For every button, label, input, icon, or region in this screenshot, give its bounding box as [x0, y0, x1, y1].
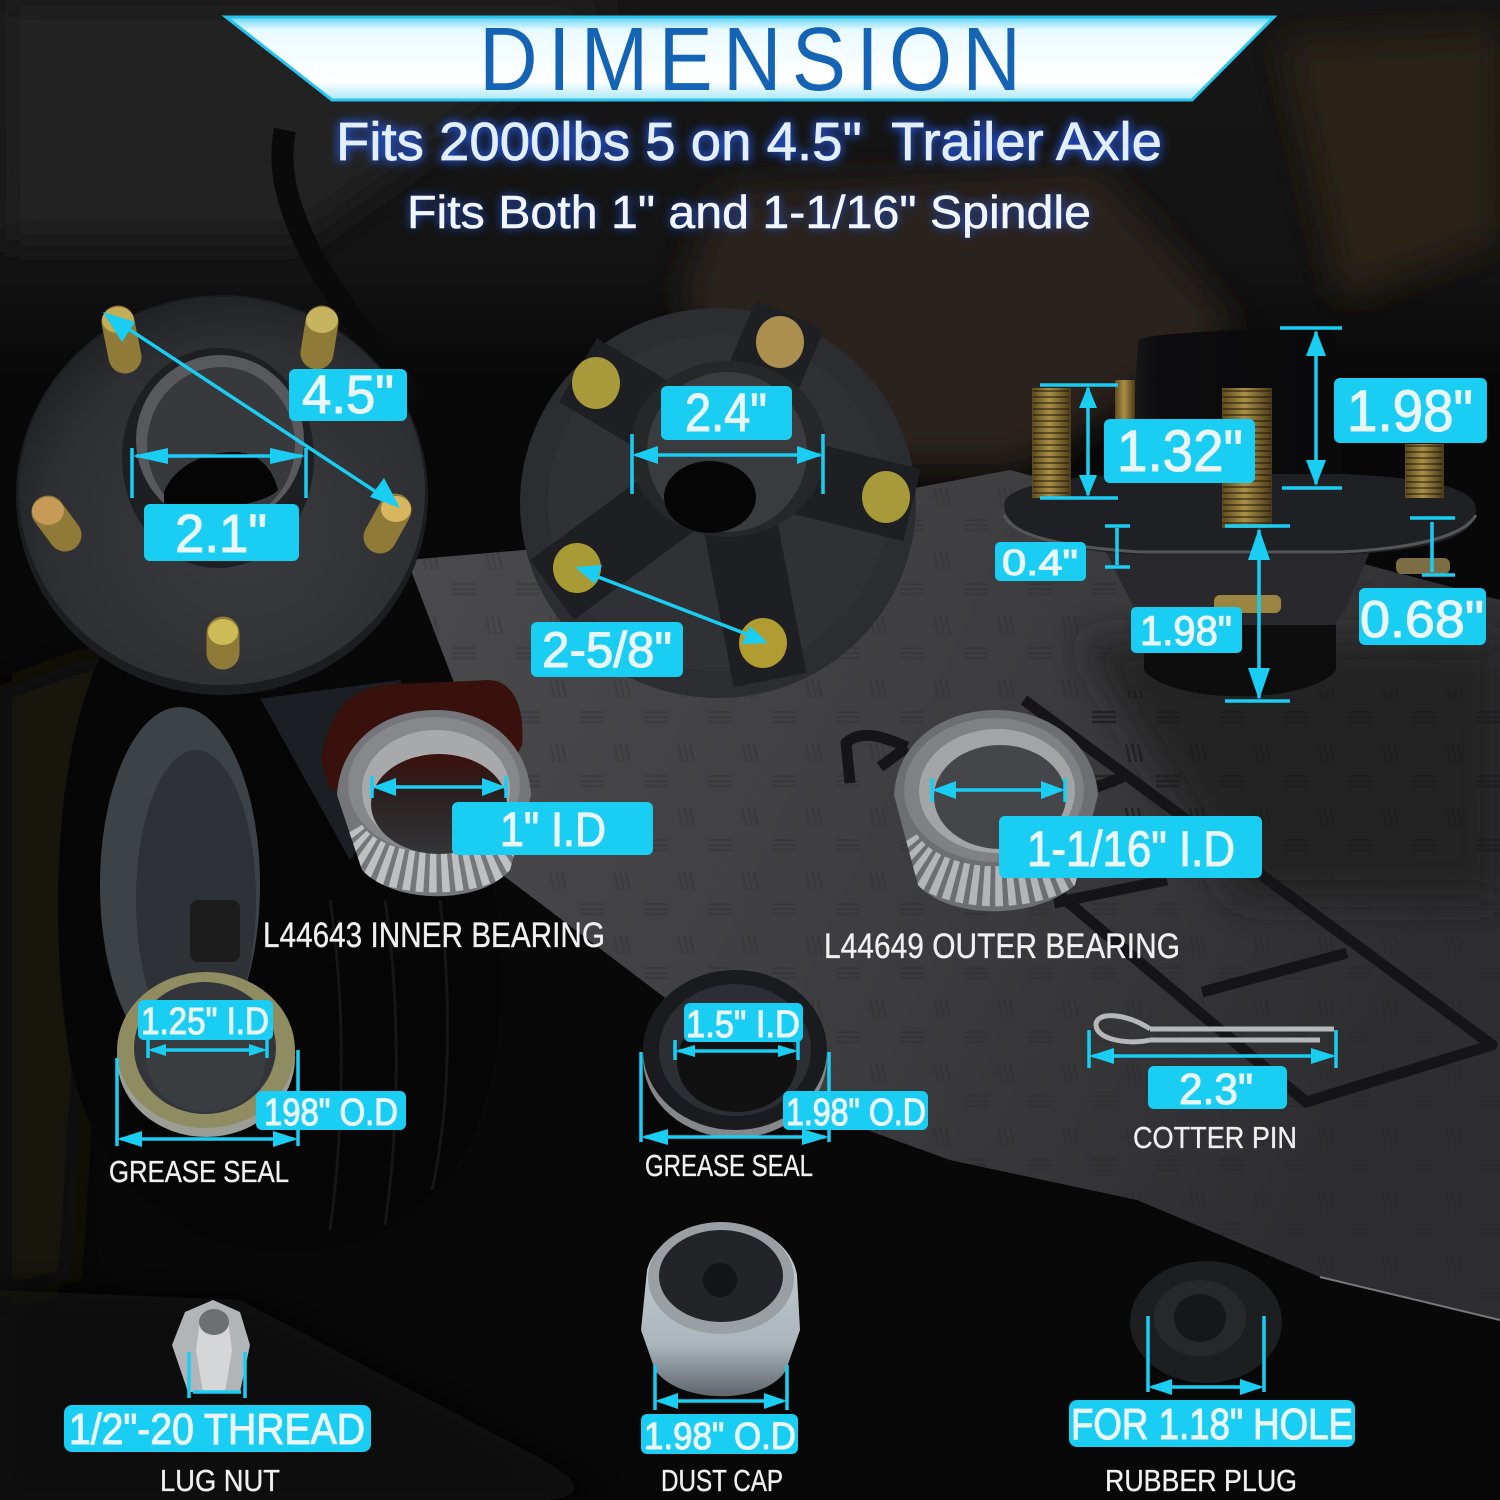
- title banner: [226, 9, 1274, 110]
- dimension: 1.98 top: 1.98": [1347, 379, 1473, 444]
- dimension: hole: FOR 1.18" HOLE: [1071, 1400, 1353, 1449]
- dimension: 4.5: 4.5": [302, 365, 394, 425]
- dimension: 1.98 OD: 1.98" O.D: [644, 1416, 796, 1458]
- caption: COTTER PIN: [1133, 1120, 1297, 1155]
- dimension: 1.98 OD: 198" O.D: [264, 1092, 398, 1134]
- subtitle 1: Fits 2000lbs 5 on 4.5" Trailer Axle: [336, 112, 1162, 172]
- hub: side view: [995, 328, 1487, 701]
- dimension: 2.1: [132, 448, 306, 564]
- dimension: 2-5/8: [531, 565, 768, 678]
- dimension: thread: 1/2"-20 THREAD: [69, 1405, 365, 1454]
- dimension: 2.3: [1089, 1030, 1336, 1114]
- grease seal left: [109, 972, 406, 1189]
- caption: L44643 INNER BEARING: [263, 916, 605, 955]
- dimension: 2.4: 2.4": [685, 383, 767, 443]
- dimension: 1.98 bottom: 1.98": [1140, 607, 1232, 654]
- rubber plug: [1069, 1261, 1355, 1498]
- dimension: 2-5/8: 2-5/8": [542, 622, 672, 678]
- dimension: 2.3: 2.3": [1179, 1065, 1253, 1114]
- dimension: 1.98 OD: 1.98" O.D: [786, 1092, 926, 1134]
- dimension: 2.4: [632, 383, 823, 494]
- caption: DUST CAP: [661, 1463, 783, 1498]
- dimension: 1.98 bottom: [1131, 526, 1290, 701]
- hub: front view with studs: [16, 295, 428, 695]
- caption: RUBBER PLUG: [1105, 1463, 1297, 1498]
- caption: GREASE SEAL: [645, 1148, 813, 1183]
- dimension: 1-1/16 inch: [932, 778, 1262, 878]
- subtitle 2: Fits Both 1" and 1-1/16" Spindle: [407, 186, 1091, 238]
- trailer ladder rack: [846, 700, 1492, 1102]
- dimension: 1.98 OD: [117, 1050, 406, 1147]
- dust cap: [641, 1222, 800, 1498]
- trailer deck plate: [407, 470, 1500, 1320]
- dimension: 1 inch: [372, 776, 653, 857]
- dimension: 1-1/16 inch: 1-1/16" I.D: [1027, 821, 1235, 877]
- dimension: 1.98 OD: [641, 1052, 928, 1145]
- wheel: [58, 640, 500, 1254]
- dimension: 0.68: 0.68": [1360, 591, 1484, 649]
- hub: rear view with lug bolts: [520, 308, 916, 698]
- subtitle 2: Fits Both 1" and 1-1/16" Spindle: [407, 186, 1091, 238]
- dimension: 1.98 OD: [641, 1365, 798, 1458]
- inner bearing: [263, 710, 653, 955]
- subtitle 1: Fits 2000lbs 5 on 4.5" Trailer Axle: [336, 112, 1162, 172]
- dimension: 4.5: [103, 312, 407, 508]
- dimension: 0.68: [1359, 518, 1486, 649]
- dimension: 1.5 ID: 1.5" I.D: [686, 1004, 800, 1046]
- dimension: 1.32: 1.32": [1117, 419, 1243, 484]
- dimension: 1.25 ID: [138, 1000, 273, 1058]
- lug nut: [64, 1300, 371, 1498]
- dimension: 1.32: [1040, 385, 1255, 498]
- dimension: 1 inch: 1" I.D: [500, 804, 606, 857]
- dimension: 2.1: 2.1": [175, 504, 267, 564]
- dimension: 0.4: [995, 526, 1130, 583]
- outer bearing: [824, 710, 1262, 966]
- dimension: hole: [1069, 1316, 1355, 1449]
- lug bolts: [553, 316, 910, 668]
- cotter pin: [1089, 1016, 1336, 1155]
- title text: DIMENSION: [479, 9, 1021, 110]
- grease seal middle: [641, 970, 928, 1183]
- caption: GREASE SEAL: [109, 1154, 289, 1189]
- tail lamp: [321, 680, 523, 790]
- dimension: 1.25 ID: 1.25" I.D: [141, 1001, 269, 1043]
- dimension: 1.5 ID: [675, 1003, 803, 1060]
- dimension: 1.98 top: [1280, 328, 1487, 488]
- dimension: thread: [64, 1352, 371, 1454]
- caption: L44649 OUTER BEARING: [824, 927, 1180, 966]
- caption: LUG NUT: [160, 1463, 280, 1498]
- dimension: 0.4: 0.4": [1002, 542, 1078, 583]
